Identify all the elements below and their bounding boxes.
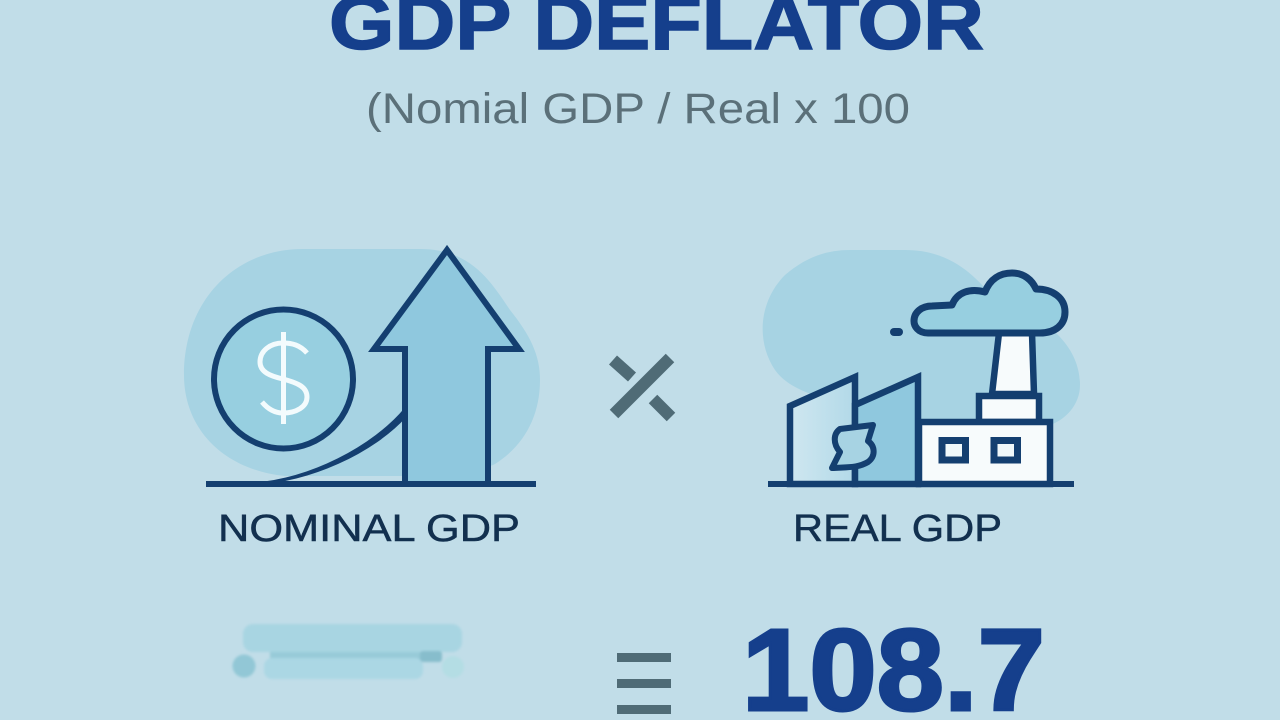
baseline: [768, 481, 1074, 487]
building left: [790, 377, 855, 484]
window right: [994, 440, 1018, 460]
window left: [942, 440, 966, 460]
icon: nominal GDP: [184, 249, 540, 487]
emblem: [832, 425, 874, 468]
subtitle: formula: (Nomial GDP / Real x 100: [366, 85, 910, 133]
building middle: [855, 377, 918, 484]
chimney base: [979, 396, 1039, 422]
smoke cloud: [914, 273, 1065, 333]
smoke dot: [890, 328, 903, 336]
equals sign: [617, 653, 671, 714]
factory body: [919, 422, 1050, 484]
growth curve: [245, 409, 405, 484]
blurred placeholder shape: [232, 624, 464, 679]
label: nominal GDP: NOMINAL GDP: [218, 508, 520, 550]
icon: dollar coin: [214, 310, 353, 448]
label: real GDP: REAL GDP: [793, 508, 1002, 550]
multiplication sign: [613, 358, 671, 417]
icon: up arrow: [374, 250, 519, 484]
chimney: [992, 333, 1034, 394]
baseline: [206, 481, 536, 487]
icon: real GDP factory: [763, 250, 1080, 487]
